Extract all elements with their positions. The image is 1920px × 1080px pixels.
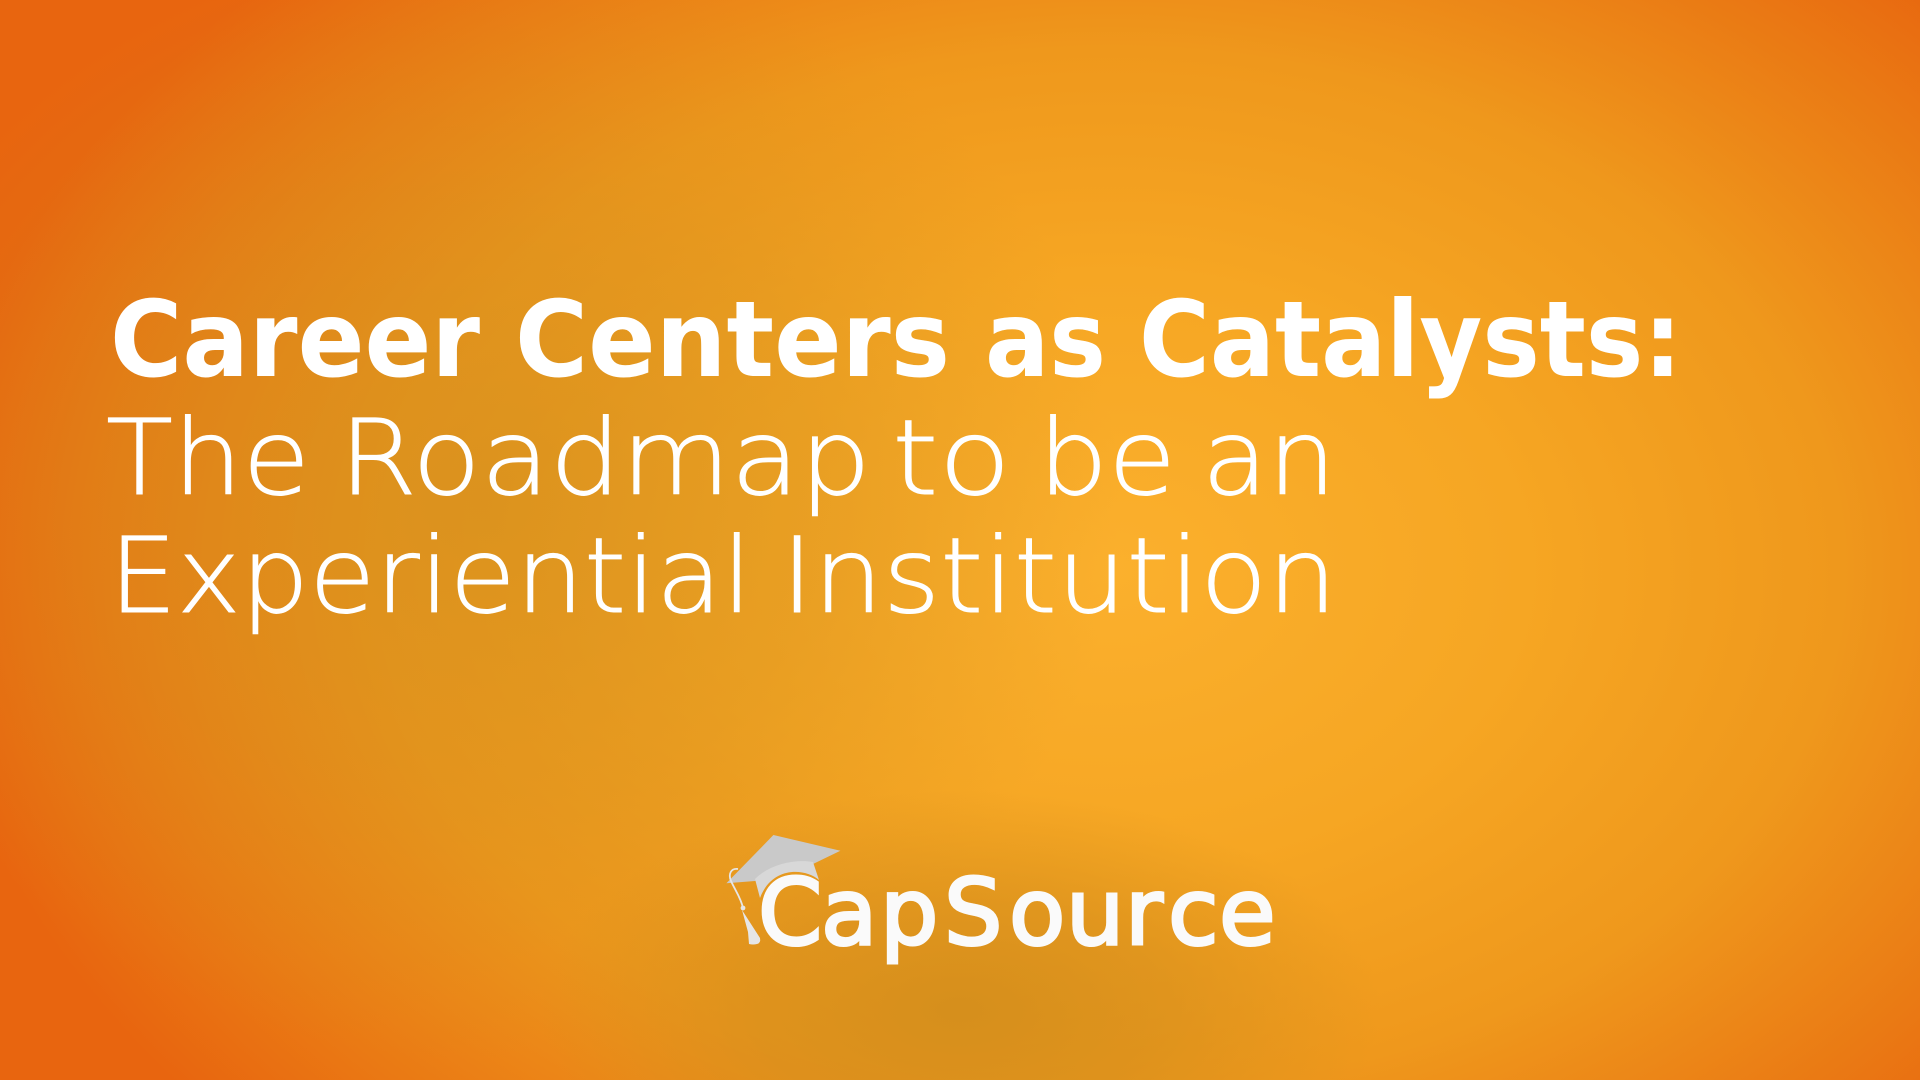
icon: graduation cap <box>726 835 840 944</box>
title line 2: light: to <box>892 397 1011 519</box>
title line 2: light <box>106 397 1336 519</box>
title line 2: light: an <box>1202 397 1336 519</box>
title line 1: bold: Centers <box>515 279 950 401</box>
title line 2: light: Roadmap <box>339 397 871 519</box>
title line 3: light <box>109 515 1337 637</box>
title line 2: light: The <box>106 397 310 519</box>
title line 2: light: be <box>1038 397 1176 519</box>
title line 3: light: Experiential <box>109 515 752 637</box>
title line 3: light: Institution <box>781 515 1337 637</box>
title line 1: bold: Catalysts: <box>1139 279 1682 401</box>
title <box>106 279 1682 637</box>
title line 1: bold: Career <box>110 279 480 401</box>
logo: CapSource <box>726 835 1276 966</box>
wordmark: CapSource <box>758 859 1276 966</box>
title line 1: bold <box>110 279 1682 401</box>
title line 1: bold: as <box>985 279 1106 401</box>
